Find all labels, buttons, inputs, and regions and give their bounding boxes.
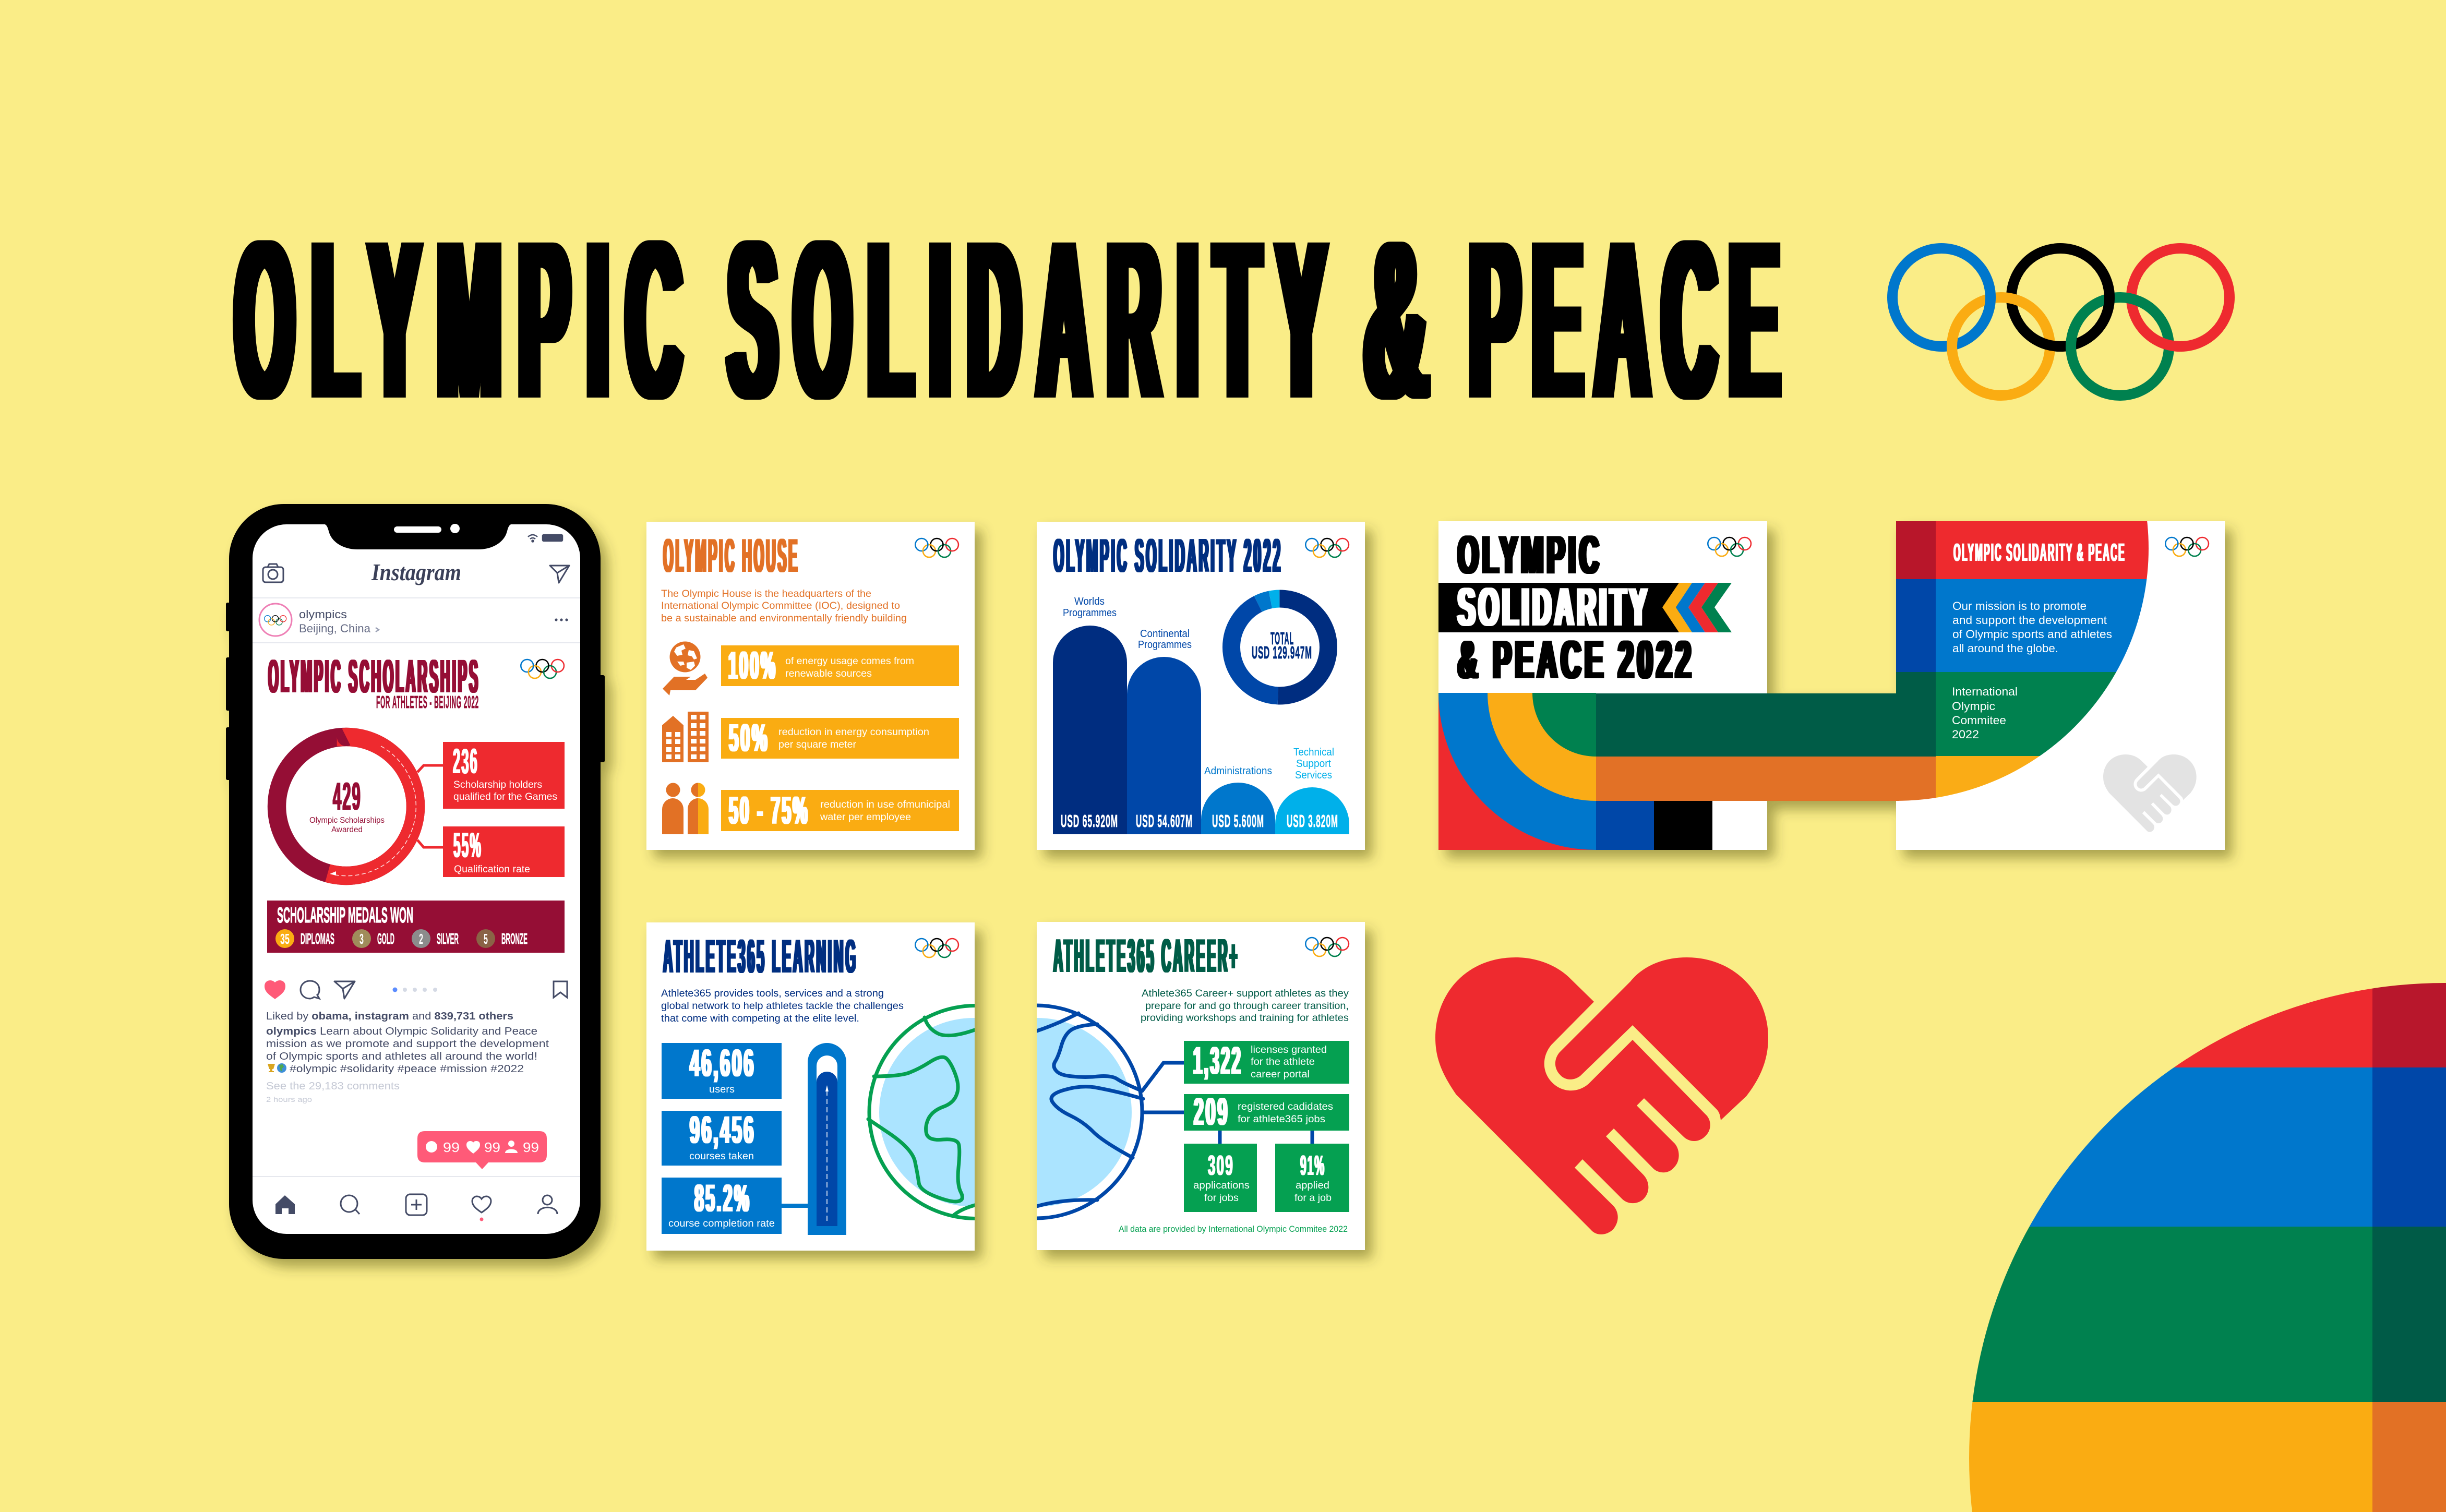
icon: red handshake heart bbox=[1435, 957, 1768, 1234]
stat: 50-75%: 50 - 75% bbox=[729, 788, 809, 832]
bar chart: programmes: Worlds bbox=[1074, 596, 1105, 607]
panel: phone mockup bbox=[226, 504, 605, 1259]
intro text: The Olympic House is the headquarters of the bbox=[661, 588, 871, 599]
panel: athlete365 learning: ATHLETE365 LEARNING bbox=[663, 930, 858, 983]
caption text: mission as we promote and support the development bbox=[266, 1038, 549, 1050]
icon: rings bbox=[2165, 537, 2209, 556]
organisation text: 2022 bbox=[1952, 728, 1979, 741]
medals panel: BRONZE bbox=[501, 931, 527, 947]
donut chart: scholarships: 429 bbox=[333, 774, 362, 818]
card background bbox=[1037, 522, 1365, 850]
callout connectors bbox=[417, 765, 443, 847]
phone body bbox=[226, 504, 605, 1259]
progress thermometer bbox=[808, 1043, 846, 1235]
organisation text: International bbox=[1952, 685, 2018, 698]
stat: candidates bbox=[1184, 1090, 1349, 1133]
timestamp: 2 hours ago bbox=[266, 1095, 312, 1103]
stat: licenses bbox=[1184, 1039, 1349, 1084]
icon: rings bbox=[915, 538, 958, 557]
stat: 50% bbox=[721, 716, 959, 760]
icon: globe in hand bbox=[663, 642, 708, 695]
medals panel: SILVER bbox=[437, 931, 459, 947]
stat: 50-75%: water per employee bbox=[820, 811, 911, 823]
caption text: olympics Learn about Olympic Solidarity and Peace bbox=[266, 1026, 537, 1037]
intro text: global network to help athletes tackle the challenges bbox=[661, 1000, 904, 1012]
card shapes with shared shadow bbox=[1438, 521, 2225, 850]
bar chart: programmes: Services bbox=[1295, 770, 1332, 781]
footnote: All data are provided by International Olympic Commitee 2022 bbox=[1119, 1224, 1348, 1234]
icon: people bbox=[662, 783, 709, 834]
donut chart: scholarships: Awarded bbox=[331, 825, 363, 834]
caption text: #olympic #solidarity #peace #mission #2022 bbox=[290, 1063, 524, 1075]
bar chart: programmes: USD 5.600M bbox=[1212, 811, 1264, 831]
mission text bbox=[1952, 599, 2112, 655]
stat: courses taken bbox=[662, 1108, 782, 1166]
stat: 100%: 100% bbox=[728, 643, 777, 687]
icon: grey handshake heart bbox=[2103, 754, 2197, 832]
intro text: be a sustainable and environmentally friendly building bbox=[661, 613, 907, 624]
panel: olympic house: OLYMPIC HOUSE bbox=[663, 530, 799, 582]
stat: licenses: licenses granted bbox=[1251, 1044, 1327, 1055]
notification bubble: 99 bbox=[443, 1139, 460, 1155]
medals panel: 3 bbox=[359, 931, 364, 947]
stat: 100% bbox=[721, 643, 959, 687]
cover heading line 3: & PEACE 2022 bbox=[1458, 630, 1695, 690]
mission text: Our mission is to promote bbox=[1952, 599, 2087, 613]
title: OLYMPIC bbox=[235, 194, 699, 446]
location: Beijing, China bbox=[299, 622, 371, 635]
intro text: Athlete365 provides tools, services and a strong bbox=[661, 988, 884, 999]
medals panel: DIPLOMAS bbox=[301, 931, 334, 947]
stat: completion rate: course completion rate bbox=[668, 1218, 775, 1229]
bar chart: programmes: USD 65.920M bbox=[1061, 811, 1118, 831]
status icons bbox=[528, 535, 562, 542]
dividers bbox=[253, 597, 580, 1177]
icon: activity heart bbox=[472, 1196, 491, 1213]
stat: candidates: for athlete365 jobs bbox=[1238, 1113, 1325, 1125]
donut chart: total bbox=[1231, 599, 1328, 696]
phone screen bbox=[253, 524, 580, 1234]
panel: athlete365 career bbox=[1036, 922, 1381, 1267]
stat: licenses: career portal bbox=[1251, 1069, 1310, 1080]
stat: candidates: registered cadidates bbox=[1238, 1101, 1333, 1112]
stat: completion rate bbox=[662, 1177, 782, 1234]
medals panel: 5 bbox=[484, 931, 488, 947]
donut chart: scholarships bbox=[277, 737, 416, 876]
bar chart: programmes: Administrations bbox=[1204, 765, 1272, 777]
notification bubble: 99 bbox=[484, 1139, 500, 1155]
connectors bbox=[1142, 1063, 1312, 1144]
stat: applied: for a job bbox=[1294, 1192, 1332, 1204]
medals panel bbox=[267, 901, 565, 953]
icon: trophy and globe emoji bbox=[268, 1063, 286, 1073]
panel: cover spread: SOLIDARITY bbox=[1458, 577, 1650, 638]
phone notch bbox=[322, 524, 513, 549]
panel: olympic house bbox=[646, 522, 975, 850]
caption text: of Olympic sports and athletes all around the world! bbox=[266, 1051, 537, 1062]
stat: courses taken: courses taken bbox=[689, 1151, 754, 1162]
stat: users: users bbox=[709, 1084, 735, 1095]
callout: 55% qualification: 55% bbox=[453, 825, 482, 865]
stat: candidates: 209 bbox=[1194, 1090, 1229, 1133]
bar chart: programmes: USD 3.820M bbox=[1287, 811, 1338, 831]
intro text: that come with competing at the elite level. bbox=[661, 1013, 859, 1024]
globe illustration bbox=[866, 1004, 975, 1220]
icon: rings bbox=[1708, 537, 1751, 556]
avatar bbox=[259, 604, 292, 636]
icon: buildings bbox=[662, 712, 709, 762]
icon: add bbox=[406, 1194, 427, 1215]
icon: camera bbox=[263, 564, 283, 582]
donut chart: total: USD 129.947M bbox=[1252, 643, 1312, 662]
mission text: all around the globe. bbox=[1952, 642, 2058, 655]
stat: applied bbox=[1275, 1144, 1349, 1212]
carousel dots bbox=[392, 987, 437, 992]
panel: phone mockup: FOR ATHLETES - BEIJING 2022 bbox=[376, 692, 479, 712]
bar chart: programmes bbox=[1053, 596, 1349, 834]
icon: like heart bbox=[265, 980, 285, 999]
icon: profile bbox=[538, 1195, 557, 1214]
card background bbox=[646, 522, 975, 850]
callout: 236 holders: Scholarship holders bbox=[453, 779, 542, 790]
icon: rings bbox=[1305, 938, 1349, 956]
callout: 55% qualification bbox=[443, 825, 565, 877]
bar chart: programmes: Continental bbox=[1140, 628, 1190, 640]
icon: search bbox=[341, 1195, 359, 1214]
donut chart: total: TOTAL bbox=[1270, 629, 1294, 648]
card background bbox=[1037, 922, 1365, 1250]
mission text: of Olympic sports and athletes bbox=[1952, 628, 2112, 641]
title: & bbox=[1364, 194, 1428, 446]
panel: athlete365 learning bbox=[645, 922, 990, 1267]
chevrons bbox=[1662, 583, 1732, 632]
bar chart: programmes: USD 54.607M bbox=[1136, 811, 1193, 831]
panel: cover spread: OLYMPIC SOLIDARITY & PEACE bbox=[1953, 539, 2126, 567]
donut chart: scholarships: Olympic Scholarships bbox=[309, 816, 385, 825]
organisation text bbox=[1952, 685, 2018, 741]
speaker and camera bbox=[394, 524, 460, 533]
bar chart: programmes: Support bbox=[1296, 758, 1331, 770]
intro text bbox=[661, 588, 907, 624]
comments link: See the 29,183 comments bbox=[266, 1081, 400, 1092]
decorative coloured quarter circle bbox=[1967, 981, 2446, 1512]
card background bbox=[646, 922, 975, 1251]
intro text: International Olympic Committee (IOC), designed to bbox=[661, 600, 900, 611]
icon: share bbox=[334, 981, 355, 999]
instagram wordmark: Instagram bbox=[371, 559, 461, 585]
stat: licenses: 1,322 bbox=[1193, 1039, 1242, 1082]
notification bubble: 99 bbox=[523, 1139, 539, 1155]
icon: bookmark bbox=[554, 981, 567, 998]
location chevron bbox=[376, 628, 379, 632]
stat: 50%: per square meter bbox=[778, 739, 856, 750]
stat: applications bbox=[1184, 1144, 1257, 1212]
stat: applications: for jobs bbox=[1204, 1192, 1239, 1204]
stat: 100%: renewable sources bbox=[785, 668, 872, 679]
stat: applied: 91% bbox=[1300, 1150, 1325, 1181]
bar chart: programmes: Technical bbox=[1293, 747, 1334, 758]
stat: users bbox=[662, 1041, 782, 1099]
text: OLYMPIC SCHOLARSHIPS bbox=[268, 651, 480, 703]
organisation text: Olympic bbox=[1952, 700, 1995, 713]
activity dot bbox=[480, 1218, 483, 1221]
more dots bbox=[555, 618, 568, 621]
text: ATHLETE365 CAREER+ bbox=[1053, 930, 1239, 982]
icon: direct message bbox=[550, 566, 569, 583]
stat: courses taken: 96,456 bbox=[690, 1108, 756, 1151]
icon: home bbox=[275, 1195, 295, 1214]
notification bubble bbox=[417, 1131, 547, 1169]
stat: licenses: for the athlete bbox=[1251, 1056, 1315, 1067]
callout: 236 holders: qualified for the Games bbox=[453, 791, 557, 802]
panel: cover spread bbox=[1438, 521, 2225, 850]
intro text: Athlete365 Career+ support athletes as they bbox=[1142, 988, 1349, 999]
callout: 55% qualification: Qualification rate bbox=[454, 864, 530, 875]
stat: 50%: 50% bbox=[729, 716, 769, 760]
intro text bbox=[1141, 988, 1349, 1024]
icon: rings bbox=[1305, 538, 1349, 557]
stat: 50%: reduction in energy consumption bbox=[778, 726, 929, 738]
bar chart: programmes: Programmes bbox=[1138, 639, 1192, 651]
bar chart: programmes: Programmes bbox=[1063, 607, 1117, 619]
caption text bbox=[266, 1011, 549, 1075]
globe illustration bbox=[1037, 1004, 1145, 1220]
medals panel: 2 bbox=[419, 931, 423, 947]
stat: 100%: of energy usage comes from bbox=[785, 655, 914, 667]
stat: 50-75%: reduction in use ofmunicipal bbox=[820, 799, 950, 810]
icon: comment bbox=[301, 981, 319, 999]
panel: cover spread: OLYMPIC bbox=[1458, 525, 1602, 585]
stat: completion rate: 85.2% bbox=[694, 1177, 751, 1220]
text: OLYMPIC SOLIDARITY 2022 bbox=[1053, 530, 1282, 582]
stat: applications: 309 bbox=[1208, 1150, 1234, 1181]
mission text: and support the development bbox=[1952, 614, 2107, 627]
stat: applied: applied bbox=[1296, 1180, 1329, 1191]
callout: 236 holders bbox=[443, 741, 565, 809]
text: PEACE bbox=[1470, 194, 1792, 446]
black band bbox=[1438, 583, 1680, 632]
intro text: providing workshops and training for athletes bbox=[1141, 1012, 1349, 1024]
stat: users: 46,606 bbox=[690, 1041, 756, 1085]
caption text: Liked by obama, instagram and 839,731 others bbox=[266, 1011, 513, 1022]
account name: olympics bbox=[299, 608, 347, 621]
icon: rings bbox=[915, 939, 958, 957]
medals panel: 35 bbox=[280, 931, 290, 947]
connector bbox=[782, 1204, 808, 1208]
intro text: prepare for and go through career transition, bbox=[1145, 1000, 1349, 1012]
stat: applications: applications bbox=[1193, 1180, 1250, 1191]
medals panel: GOLD bbox=[377, 931, 394, 947]
intro text bbox=[661, 988, 904, 1024]
organisation text: Commitee bbox=[1952, 714, 2006, 727]
callout: 236 holders: 236 bbox=[453, 741, 478, 781]
icon: rings bbox=[521, 659, 564, 678]
panel: olympic solidarity 2022 bbox=[1037, 522, 1365, 850]
medals panel: SCHOLARSHIP MEDALS WON bbox=[277, 903, 413, 927]
icon: olympic rings large bbox=[1892, 248, 2229, 395]
